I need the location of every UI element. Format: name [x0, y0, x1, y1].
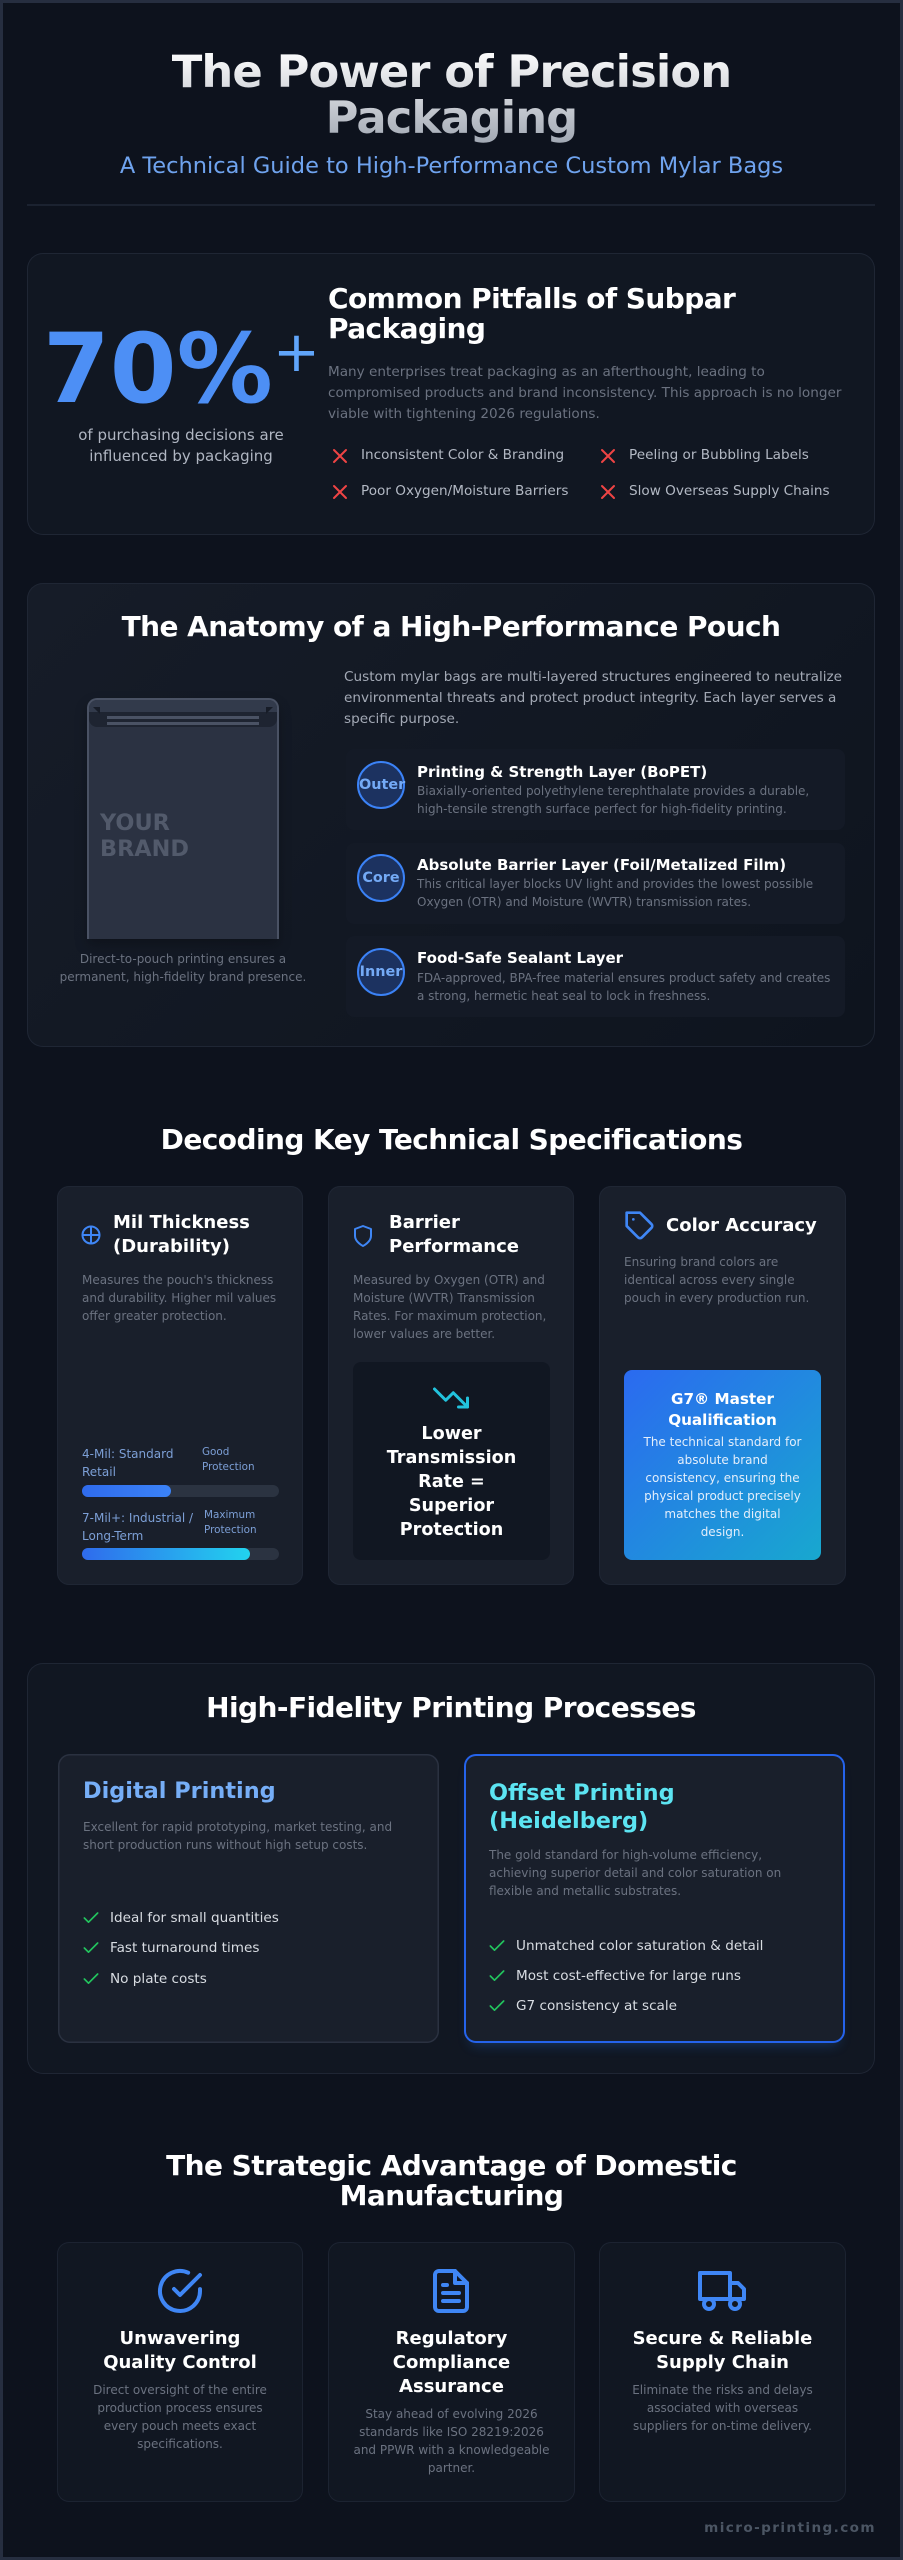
- pitfalls body text: Many enterprises treat packaging as an afterthought, leading to: [328, 364, 765, 380]
- card title: Color Accuracy: [666, 1215, 817, 1236]
- callout text: Lower: [421, 1424, 482, 1444]
- bar value label: Protection: [204, 1524, 257, 1536]
- card text: and durability. Higher mil values: [82, 1291, 276, 1305]
- layer title: Printing & Strength Layer (BoPET): [417, 763, 707, 781]
- title: Packaging: [326, 91, 577, 144]
- card title: Secure & Reliable: [633, 2328, 812, 2349]
- card: barrier performance: [328, 1186, 574, 1585]
- card title: (Durability): [113, 1236, 230, 1257]
- callout text: The technical standard for: [643, 1435, 802, 1449]
- layer description: Biaxially-oriented polyethylene terephthalate provides a durable,: [417, 784, 809, 798]
- card text: specifications.: [137, 2437, 223, 2451]
- callout: lower transmission: [353, 1362, 550, 1560]
- icon: document: [427, 2267, 475, 2315]
- benefit item: Fast turnaround times: [110, 1940, 259, 1956]
- bar value label: Protection: [202, 1461, 255, 1473]
- card text: every pouch meets exact: [104, 2419, 256, 2433]
- layer description: [417, 971, 830, 1003]
- pitfalls body text: compromised products and brand inconsistency. This approach is no longer: [328, 385, 841, 401]
- bar label: [82, 1447, 173, 1479]
- offset title: Offset Printing: [489, 1780, 675, 1806]
- icon: x mark: [601, 449, 615, 463]
- pouch brand text: BRAND: [100, 836, 189, 862]
- stat caption: influenced by packaging: [89, 447, 273, 465]
- panel: common pitfalls: [27, 253, 875, 535]
- title: The Power of Precision: [172, 45, 731, 98]
- pitfalls heading: Packaging: [328, 312, 485, 345]
- layer title: Food-Safe Sealant Layer: [417, 949, 623, 967]
- card text: [82, 1273, 276, 1323]
- icon: check: [490, 1970, 504, 1981]
- layer badge: [357, 761, 405, 809]
- card title: Performance: [389, 1236, 519, 1257]
- card text: [624, 1255, 809, 1305]
- pitfall item: Peeling or Bubbling Labels: [629, 447, 809, 463]
- layer badge: [357, 948, 405, 996]
- subtitle: A Technical Guide to High-Performance Custom Mylar Bags: [120, 153, 783, 179]
- bar value label: [202, 1446, 255, 1473]
- callout text: physical product precisely: [644, 1489, 801, 1503]
- pouch brand text: YOUR: [100, 810, 170, 836]
- big stat: 70%+: +: [273, 320, 320, 385]
- card title: Unwavering: [120, 2328, 240, 2349]
- layer badge: Outer: [359, 777, 405, 793]
- icon: x mark: [333, 485, 347, 499]
- icon: shield: [354, 1225, 372, 1247]
- layer badge: [357, 854, 405, 902]
- panel: pouch anatomy: [27, 583, 875, 1047]
- callout text: matches the digital: [664, 1507, 781, 1521]
- anatomy heading: The Anatomy of a High-Performance Pouch: [122, 610, 780, 643]
- card title: [599, 2327, 846, 2375]
- card title: Compliance: [393, 2352, 510, 2373]
- card text: Direct oversight of the entire: [93, 2383, 267, 2397]
- icon: tag: [625, 1211, 654, 1240]
- icon: trending down: [433, 1387, 469, 1409]
- card title: [328, 2327, 575, 2399]
- panel: printing processes: [27, 1663, 875, 2074]
- card: offset printing: [464, 1754, 845, 2043]
- card title: [389, 1212, 519, 1257]
- domestic heading: The Strategic Advantage of Domestic: [166, 2149, 737, 2182]
- card text: Measures the pouch's thickness: [82, 1273, 273, 1287]
- big stat: 70%+: 70%: [43, 313, 273, 425]
- offset title: (Heidelberg): [489, 1808, 648, 1834]
- bar value label: Good: [202, 1446, 229, 1458]
- callout: G7 qualification: [624, 1370, 821, 1560]
- layer badge: Core: [362, 870, 400, 886]
- bar label: [82, 1511, 193, 1543]
- icon: check: [490, 1940, 504, 1951]
- bar value label: Maximum: [204, 1509, 255, 1521]
- layer description: Oxygen (OTR) and Moisture (WVTR) transmission rates.: [417, 895, 751, 909]
- callout title: [668, 1390, 777, 1429]
- card text: Measured by Oxygen (OTR) and: [353, 1273, 545, 1287]
- layer description: [417, 877, 813, 909]
- bar value label: [204, 1509, 257, 1536]
- bar label: 7-Mil+: Industrial /: [82, 1511, 193, 1525]
- card: digital printing: [58, 1754, 439, 2043]
- card: regulatory compliance: [328, 2242, 575, 2502]
- specs heading: Decoding Key Technical Specifications: [161, 1123, 742, 1156]
- card text: [328, 2405, 575, 2477]
- callout title: G7® Master: [671, 1390, 774, 1408]
- card text: Ensuring brand colors are: [624, 1255, 778, 1269]
- pouch caption: permanent, high-fidelity brand presence.: [60, 970, 306, 984]
- card text: [57, 2381, 303, 2453]
- callout text: design.: [701, 1525, 744, 1539]
- card title: Supply Chain: [656, 2352, 789, 2373]
- offset text: achieving superior detail and color saturation on: [489, 1866, 781, 1880]
- section: technical specifications: [57, 1123, 846, 1585]
- domestic heading: [57, 2151, 846, 2211]
- card title: Regulatory: [396, 2328, 507, 2349]
- title: [172, 45, 731, 144]
- card text: pouch in every production run.: [624, 1291, 809, 1305]
- pitfalls body text: [328, 364, 842, 422]
- icon: check: [84, 1912, 98, 1923]
- benefit item: G7 consistency at scale: [516, 1998, 677, 2014]
- card text: Rates. For maximum protection,: [353, 1309, 546, 1323]
- callout text: [386, 1424, 516, 1540]
- card text: suppliers for on-time delivery.: [633, 2419, 812, 2433]
- layer description: FDA-approved, BPA-free material ensures product safety and creates: [417, 971, 830, 985]
- pouch caption: [60, 952, 306, 984]
- pitfalls heading: Common Pitfalls of Subpar: [328, 282, 735, 315]
- card title: Assurance: [399, 2376, 504, 2397]
- printing heading: High-Fidelity Printing Processes: [206, 1691, 696, 1724]
- bar label: 4-Mil: Standard: [82, 1447, 173, 1461]
- pitfall item: Slow Overseas Supply Chains: [629, 483, 830, 499]
- digital text: short production runs without high setup costs.: [83, 1838, 367, 1852]
- card text: [599, 2381, 846, 2435]
- icon: mil circle: [82, 1226, 100, 1244]
- domestic heading: Manufacturing: [340, 2179, 563, 2212]
- layer: outer: [346, 749, 845, 830]
- card title: Mil Thickness: [113, 1212, 250, 1233]
- bar: 4-mil: [82, 1485, 279, 1497]
- callout text: [643, 1435, 802, 1539]
- pitfalls body text: viable with tightening 2026 regulations.: [328, 406, 600, 422]
- bar: 7-mil: [82, 1548, 279, 1560]
- anatomy intro text: specific purpose.: [344, 711, 459, 727]
- card title: Quality Control: [103, 2352, 257, 2373]
- card text: lower values are better.: [353, 1327, 495, 1341]
- card text: identical across every single: [624, 1273, 795, 1287]
- footer domain: micro-printing.com: [704, 2520, 876, 2536]
- callout text: Rate =: [418, 1472, 485, 1492]
- layer description: high-tensile strength surface perfect for high-fidelity printing.: [417, 802, 787, 816]
- offset text: The gold standard for high-volume efficiency,: [489, 1848, 762, 1862]
- card text: Eliminate the risks and delays: [632, 2383, 813, 2397]
- offset text: [489, 1848, 781, 1898]
- offset text: flexible and metallic substrates.: [489, 1884, 681, 1898]
- icon: truck: [698, 2267, 746, 2315]
- card title: Barrier: [389, 1212, 460, 1233]
- pitfalls heading: [328, 282, 736, 345]
- callout text: Protection: [400, 1520, 503, 1540]
- pitfall item: Poor Oxygen/Moisture Barriers: [361, 483, 568, 499]
- card title: [57, 2327, 303, 2375]
- digital title: Digital Printing: [83, 1778, 276, 1804]
- layer title: Absolute Barrier Layer (Foil/Metalized Film): [417, 856, 786, 874]
- layer: core: [346, 843, 845, 924]
- anatomy intro text: environmental threats and protect product integrity. Each layer serves a: [344, 690, 836, 706]
- pouch illustration: [87, 698, 279, 939]
- stat caption: [78, 426, 284, 465]
- benefit item: Most cost-effective for large runs: [516, 1968, 741, 1984]
- layer description: This critical layer blocks UV light and provides the lowest possible: [417, 877, 813, 891]
- card: quality control: [57, 2242, 303, 2502]
- icon: check: [84, 1942, 98, 1953]
- card text: Moisture (WVTR) Transmission: [353, 1291, 535, 1305]
- bar label: Long-Term: [82, 1529, 143, 1543]
- card: color accuracy: [599, 1186, 846, 1585]
- icon: check: [487, 1996, 507, 2016]
- callout text: consistency, ensuring the: [645, 1471, 800, 1485]
- icon: x mark: [601, 485, 615, 499]
- pitfall item: Inconsistent Color & Branding: [361, 447, 564, 463]
- card: mil thickness: [57, 1186, 303, 1585]
- section: domestic manufacturing: [57, 2150, 846, 2502]
- anatomy intro text: Custom mylar bags are multi-layered structures engineered to neutralize: [344, 669, 842, 685]
- pouch caption: Direct-to-pouch printing ensures a: [80, 952, 286, 966]
- digital text: Excellent for rapid prototyping, market testing, and: [83, 1820, 392, 1834]
- card text: partner.: [428, 2461, 475, 2475]
- pouch brand text: [100, 810, 189, 862]
- benefit item: No plate costs: [110, 1971, 207, 1987]
- card text: associated with overseas: [647, 2401, 798, 2415]
- card text: standards like ISO 28219:2026: [359, 2425, 544, 2439]
- layer description: a strong, hermetic heat seal to lock in freshness.: [417, 989, 710, 1003]
- bar label: Retail: [82, 1465, 116, 1479]
- icon: check circle: [156, 2267, 204, 2315]
- icon: x mark: [333, 449, 347, 463]
- callout text: Superior: [409, 1496, 494, 1516]
- callout text: Transmission: [387, 1448, 516, 1468]
- card text: production process ensures: [97, 2401, 263, 2415]
- card: supply chain: [599, 2242, 846, 2502]
- anatomy intro text: [344, 669, 842, 727]
- layer: inner: [346, 936, 845, 1017]
- card text: Stay ahead of evolving 2026: [365, 2407, 538, 2421]
- benefit item: Unmatched color saturation & detail: [516, 1938, 763, 1954]
- digital text: [83, 1820, 392, 1852]
- card text: and PPWR with a knowledgeable: [353, 2443, 550, 2457]
- callout text: absolute brand: [677, 1453, 768, 1467]
- card text: offer greater protection.: [82, 1309, 227, 1323]
- layer badge: Inner: [360, 964, 402, 980]
- card text: [353, 1273, 546, 1341]
- icon: check: [84, 1973, 98, 1984]
- offset title: [489, 1780, 675, 1834]
- stat caption: of purchasing decisions are: [78, 426, 284, 444]
- card title: [113, 1212, 250, 1257]
- layer description: [417, 784, 809, 816]
- callout title: Qualification: [668, 1411, 777, 1429]
- benefit item: Ideal for small quantities: [110, 1910, 279, 1926]
